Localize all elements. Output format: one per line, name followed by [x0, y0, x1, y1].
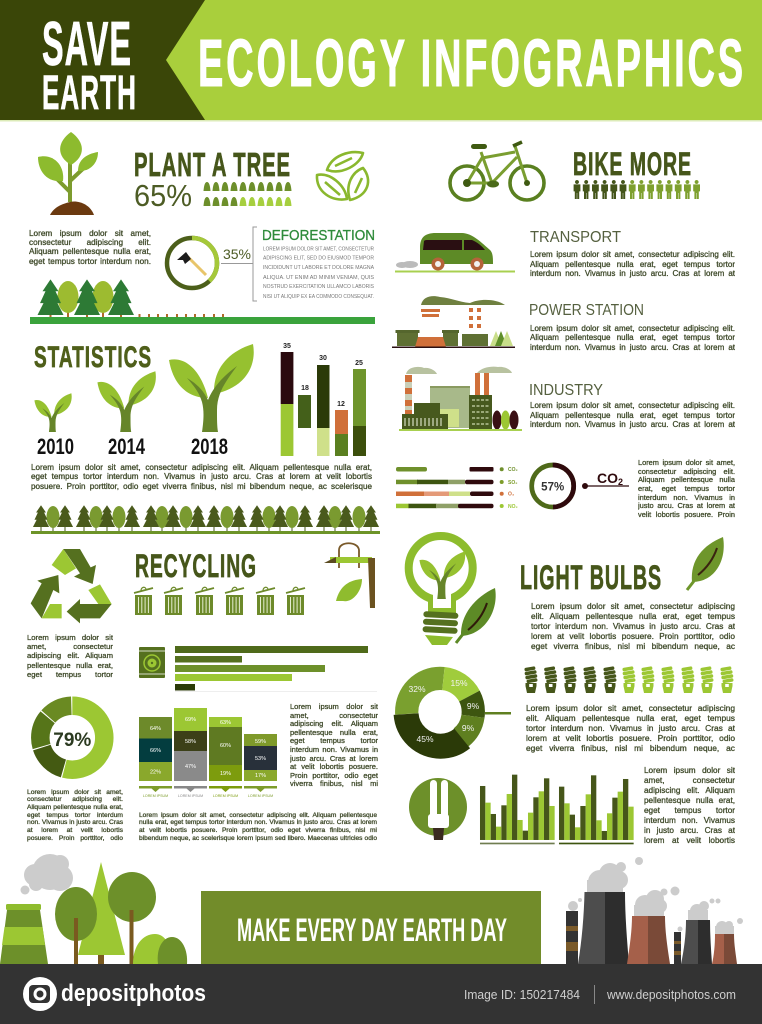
- text: co2 body: velit lobortis posuere. Proin: [638, 510, 735, 519]
- text: bulbs body: elit. Aliquam pellentesque nulla erat, eget tempus: [526, 713, 735, 723]
- text: power station body: interdum non. Vivamus in justo arcu. Cras at lorem at: [530, 342, 735, 352]
- chart: segmented donut: 15%: [450, 678, 468, 688]
- text: bar charts body: pellentesque nulla erat,: [644, 796, 735, 805]
- year labels: 2018: [191, 434, 228, 459]
- text: light bulbs body: eget viverra finibus, nisl mi bibendum neque, ac: [531, 641, 735, 651]
- chart: floating stacked bars: 12: [337, 401, 345, 408]
- chart: stacked columns: LOREM IPSUM: [178, 794, 203, 798]
- logo text: depositphotos: [61, 980, 206, 1007]
- chart: stacked columns: 47%: [185, 764, 196, 770]
- text: co2 body: interdum non. Vivamus in: [638, 493, 735, 502]
- chart: stacked columns: 63%: [220, 720, 231, 726]
- text: co2 body: Aliquam pellentesque nulla: [638, 475, 735, 484]
- chart: segmented donut: 9%: [467, 701, 480, 711]
- illustration: industry: [399, 367, 522, 431]
- icon: sprout 2010: [34, 393, 72, 432]
- text: industry body: Aliquam pellentesque nulla erat, eget tempus tortor: [530, 411, 735, 420]
- chart: emission bars: [396, 467, 518, 510]
- text: power station body: Aliquam pellentesque nulla erat, eget tempus tortor: [530, 333, 735, 342]
- heading: deforestation: DEFORESTATION: [262, 227, 375, 244]
- text: co2 body: [638, 459, 735, 521]
- chart: stacked columns: 69%: [185, 717, 196, 723]
- label: co2 callout: CO: [597, 470, 618, 486]
- text: columns side body: Proin porttitor, odio eget: [290, 771, 378, 780]
- year labels: 2014: [108, 434, 146, 459]
- footer bar: [0, 964, 762, 1024]
- icon: toxic barrel: [139, 647, 165, 678]
- text: statistics body: Lorem ipsum dolor sit amet, consectetur adipiscing elit. Aliquam pellentesque nulla erat,: [31, 462, 372, 472]
- label: co2 callout: [582, 470, 629, 489]
- text: columns side body: viverra finibus, nisl mi: [290, 779, 378, 788]
- illustration: tree line: [31, 505, 380, 534]
- chart: stacked columns: LOREM IPSUM: [248, 794, 273, 798]
- text: bar charts body: eget tempus tortor: [644, 806, 735, 815]
- text: transport body: Lorem ipsum dolor sit amet, consectetur adipiscing elit.: [530, 250, 735, 259]
- chart: stacked columns: 22%: [150, 770, 161, 776]
- chart: stacked columns: 60%: [220, 743, 231, 749]
- text: 79% body: eget tempus tortor interdum: [27, 812, 123, 819]
- text: recycling body: eget tempus tortor: [27, 670, 113, 679]
- heading: recycling: RECYCLING: [135, 548, 257, 584]
- chart: stacked columns: 59%: [255, 739, 266, 745]
- year labels: 2010: [37, 434, 74, 459]
- text: columns side body: adipiscing elit. Aliquam: [290, 719, 378, 728]
- heading: transport: TRANSPORT: [530, 229, 622, 246]
- text: deforestation body: INCIDIDUNT UT LABORE ET DOLORE MAGNA: [263, 265, 375, 271]
- text: 79% body: [27, 788, 123, 844]
- text: deforestation body: [263, 246, 375, 300]
- icon: recycling arrows: [31, 549, 112, 623]
- text: plant a tree body: [29, 229, 151, 267]
- header banner: [0, 0, 762, 122]
- text: recycling body: adipiscing elit. Aliquam: [27, 651, 113, 660]
- stat: 65%: 65%: [134, 178, 192, 213]
- heading: light bulbs: LIGHT BULBS: [520, 559, 662, 597]
- text: co2 body: consectetur adipiscing elit.: [638, 467, 735, 476]
- text: columns lower body: at velit lobortis posuere. Proin porttitor, odio eget viverra finibus, nisl mi: [139, 827, 377, 834]
- chart legend: [500, 467, 518, 510]
- icon: leaf: [687, 537, 724, 590]
- text: columns lower body: Lorem ipsum dolor sit amet, consectetur adipiscing elit. Aliquam pellentesque: [139, 812, 377, 819]
- heading: plant a tree: PLANT A TREE: [134, 146, 291, 183]
- chart: stacked columns: 66%: [150, 748, 161, 754]
- text: plant a tree body: Aliquam pellentesque nulla erat,: [29, 247, 151, 256]
- text: recycling body: amet, consectetur: [27, 642, 113, 651]
- chart: segmented donut: 45%: [416, 734, 434, 744]
- text: columns side body: at velit lobortis posuere.: [290, 762, 378, 771]
- text: columns side body: justo arcu. Cras at lorem: [290, 754, 378, 763]
- illustration: smoking factory towers: [566, 857, 743, 964]
- heading: statistics: STATISTICS: [34, 341, 152, 374]
- text: recycling body: Lorem ipsum dolor sit: [27, 633, 113, 642]
- text: bulbs body: tortor interdum non. Vivamus in justo arcu. Cras at: [526, 723, 735, 733]
- icon: camera logo: [23, 977, 57, 1011]
- label: co2 callout: 2: [618, 477, 623, 487]
- icon: eco bag with leaf: [324, 543, 375, 608]
- text: recycling body: pellentesque nulla erat,: [27, 661, 113, 670]
- text: columns side body: [290, 703, 378, 791]
- icon: light bulb with sprout: [409, 536, 496, 645]
- text: columns side body: eget tempus tortor: [290, 736, 378, 745]
- text: 79% body: posuere. Proin porttitor, odio: [27, 835, 123, 842]
- text: bulbs body: lorem at velit lobortis posuere. Proin porttitor, odio: [526, 733, 735, 743]
- text: deforestation body: NISI UT ALIQUIP EX EA COMMODO CONSEQUAT.: [263, 294, 374, 300]
- pictogram: trash bins: [134, 587, 305, 615]
- text: light bulbs body: tortor interdum non. Vivamus in justo arcu. Cras at: [531, 621, 735, 631]
- text: columns lower body: bibendum neque, ac scelerisque lorem ipsum sed libero. Maecenas ultricies odio: [139, 835, 377, 842]
- text: 79% body: at lorem at velit lobortis: [27, 827, 123, 834]
- chart: 79% donut: 79%: [53, 730, 91, 751]
- chart: stacked columns: 17%: [255, 773, 266, 779]
- text: industry body: [530, 401, 735, 430]
- text: 79% body: Lorem ipsum dolor sit amet,: [27, 788, 123, 796]
- chart: segmented donut: [406, 677, 511, 746]
- illustration: forest with stumps: [30, 279, 375, 324]
- text: light bulbs body: [531, 601, 735, 653]
- chart: floating stacked bars: 18: [301, 385, 309, 392]
- chart: segmented donut: 9%: [462, 723, 475, 733]
- text: deforestation body: LOREM IPSUM DOLOR SIT AMET, CONSECTETUR: [263, 246, 374, 252]
- chart: stacked columns: 58%: [185, 739, 196, 745]
- text: co2 body: erat, eget tempus tortor: [638, 484, 735, 493]
- icon: bicycle: [450, 142, 544, 200]
- icon: sprout 2014: [97, 371, 156, 432]
- text: co2 body: justo arcu. Cras at lorem at: [638, 501, 735, 510]
- icon: seedling: [38, 132, 98, 215]
- chart: 57% ring: 57%: [541, 482, 564, 494]
- text: statistics body: eget tempus tortor interdum non. Vivamus in justo arcu. Cras at lorem at velit lobortis: [31, 472, 372, 481]
- heading: power station: POWER STATION: [529, 302, 644, 319]
- text: deforestation body: NOSTRUD EXERCITATION ULLAMCO LABORIS: [263, 284, 375, 290]
- text: 79% body: non. Vivamus in justo arcu. Cras: [27, 819, 123, 826]
- year labels: [37, 434, 228, 459]
- chart: floating stacked bars: 35: [283, 343, 291, 350]
- text: columns lower body: [139, 812, 377, 844]
- text: bar charts body: interdum non. Vivamus: [644, 816, 735, 825]
- chart: floating stacked bars: [281, 343, 366, 456]
- illustration: van: [395, 233, 515, 272]
- text: transport body: [530, 250, 735, 279]
- pictogram: 65% trees: [204, 182, 292, 206]
- text: bulbs body: [526, 703, 735, 755]
- chart legend: O₃: [508, 492, 515, 498]
- text: transport body: interdum non. Vivamus in justo arcu. Cras at lorem at: [530, 269, 735, 278]
- chart: segmented donut: 32%: [408, 684, 426, 694]
- text: deforestation body: ALIQUA. UT ENIM AD MINIM VENIAM, QUIS: [263, 275, 375, 281]
- illustration: green tower and trees: [0, 854, 187, 964]
- chart: axe ring 35%: [167, 238, 217, 288]
- text: bar charts body: amet, consectetur: [644, 776, 735, 785]
- icon: three leaves cycle: [317, 152, 368, 200]
- chart: stacked columns: [139, 708, 277, 798]
- chart: paired bar charts: [480, 775, 634, 844]
- text: bar charts body: adipiscing elit. Aliquam: [644, 786, 735, 795]
- image id: Image ID: 150217484: [464, 988, 580, 1002]
- site url: www.depositphotos.com: [606, 988, 736, 1002]
- heading: bike more: BIKE MORE: [573, 146, 692, 182]
- text: light bulbs body: lorem at velit lobortis posuere. Proin porttitor, odio: [531, 631, 735, 641]
- text: bar charts body: in justo arcu. Cras at: [644, 826, 735, 835]
- text: power station body: [530, 324, 735, 354]
- chart legend: SO₂: [508, 480, 517, 486]
- chart: 57% ring: [532, 465, 574, 507]
- chart legend: NO₂: [508, 504, 518, 510]
- text: recycling body: [27, 633, 113, 681]
- text: plant a tree body: Lorem ipsum dolor sit amet,: [29, 229, 151, 238]
- pictogram: people: [574, 180, 700, 199]
- text: light bulbs body: elit. Aliquam pellentesque nulla erat, eget tempus: [531, 611, 735, 621]
- text: industry body: Lorem ipsum dolor sit amet, consectetur adipiscing elit.: [530, 401, 735, 410]
- text: statistics body: posuere. Proin porttitor, odio eget viverra finibus, nisl mi bibendum neque, ac scelerisque: [31, 482, 372, 490]
- chart: floating stacked bars: 30: [319, 355, 327, 362]
- text: light bulbs body: Lorem ipsum dolor sit amet, consectetur adipiscing: [531, 601, 735, 611]
- text: plant a tree body: eget tempus tortor interdum non.: [29, 257, 151, 266]
- text: bar charts body: [644, 766, 735, 848]
- chart: 79% donut: [40, 706, 104, 770]
- text: deforestation body: ADIPISCING ELIT, SED DO EIUSMOD TEMPOR: [263, 256, 374, 262]
- label: 35% with leader: 35%: [223, 246, 251, 262]
- chart: horizontal bars: [175, 646, 377, 692]
- chart legend: CO₂: [508, 467, 518, 473]
- text: bulbs body: Lorem ipsum dolor sit amet, consectetur adipiscing: [526, 703, 735, 713]
- chart: stacked columns: 19%: [220, 771, 231, 777]
- banner: earth day slogan: MAKE EVERY DAY EARTH DAY: [237, 912, 507, 948]
- text: columns side body: amet, consectetur: [290, 711, 378, 720]
- icon: sprout 2018: [169, 344, 254, 432]
- chart: stacked columns: 64%: [150, 726, 161, 732]
- text: bar charts body: lorem at velit lobortis: [644, 836, 735, 845]
- illustration: power station: [392, 296, 515, 348]
- text: columns side body: pellentesque nulla erat,: [290, 728, 378, 737]
- chart: floating stacked bars: 25: [355, 360, 363, 367]
- pictogram: bulbs: [524, 666, 734, 693]
- text: industry body: interdum non. Vivamus in justo arcu. Cras at lorem at: [530, 420, 735, 429]
- text: bulbs body: eget viverra finibus, nisl mi bibendum neque, ac: [526, 743, 735, 753]
- text: 79% body: consectetur adipiscing elit.: [27, 796, 123, 803]
- text: power station body: Lorem ipsum dolor sit amet, consectetur adipiscing elit.: [530, 324, 735, 332]
- text: transport body: Aliquam pellentesque nulla erat, eget tempus tortor: [530, 260, 735, 269]
- text: plant a tree body: consectetur adipiscing elit.: [29, 238, 151, 247]
- title: save earth: [42, 10, 137, 120]
- chart: stacked columns: LOREM IPSUM: [143, 794, 168, 798]
- chart: stacked columns: 53%: [255, 756, 266, 762]
- text: columns side body: interdum non. Vivamus in: [290, 745, 378, 754]
- text: 79% body: Aliquam pellentesque nulla erat,: [27, 804, 123, 811]
- icon: bulb in circle: [409, 778, 467, 840]
- chart: stacked columns: LOREM IPSUM: [213, 794, 238, 798]
- text: statistics body: [31, 462, 372, 492]
- heading: industry: INDUSTRY: [529, 382, 603, 399]
- title: save earth: EARTH: [42, 67, 137, 120]
- text: bar charts body: Lorem ipsum dolor sit: [644, 766, 735, 775]
- banner: earth day slogan: [201, 891, 541, 964]
- text: columns lower body: nulla erat, eget tempus tortor interdum non. Vivamus in justo arcu. Cras at lorem: [139, 819, 377, 826]
- label: 35% with leader: [221, 227, 257, 301]
- title: save earth: SAVE: [42, 10, 132, 79]
